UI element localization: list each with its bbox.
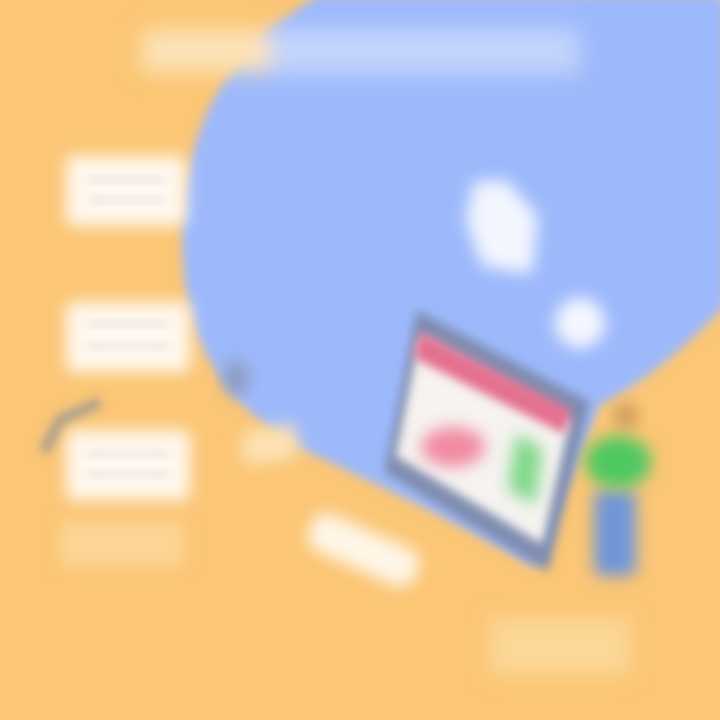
green panel [508,434,542,504]
screen header [414,332,572,434]
laptop [384,310,590,572]
card 3 [66,430,190,500]
small grey accent [223,360,249,396]
card 2 [66,302,190,372]
card 1 [66,156,186,226]
white small shape [555,298,605,348]
person [585,403,651,576]
pink chart [421,427,485,467]
title [142,28,580,74]
blue blob panel [182,0,720,568]
small pale label [239,423,301,467]
laptop screen [396,336,570,544]
icon: pencil [44,402,100,452]
white pill [302,508,425,592]
caption below card 3 [60,522,184,566]
bottom-right caption [490,618,630,674]
white document shape [466,180,538,274]
